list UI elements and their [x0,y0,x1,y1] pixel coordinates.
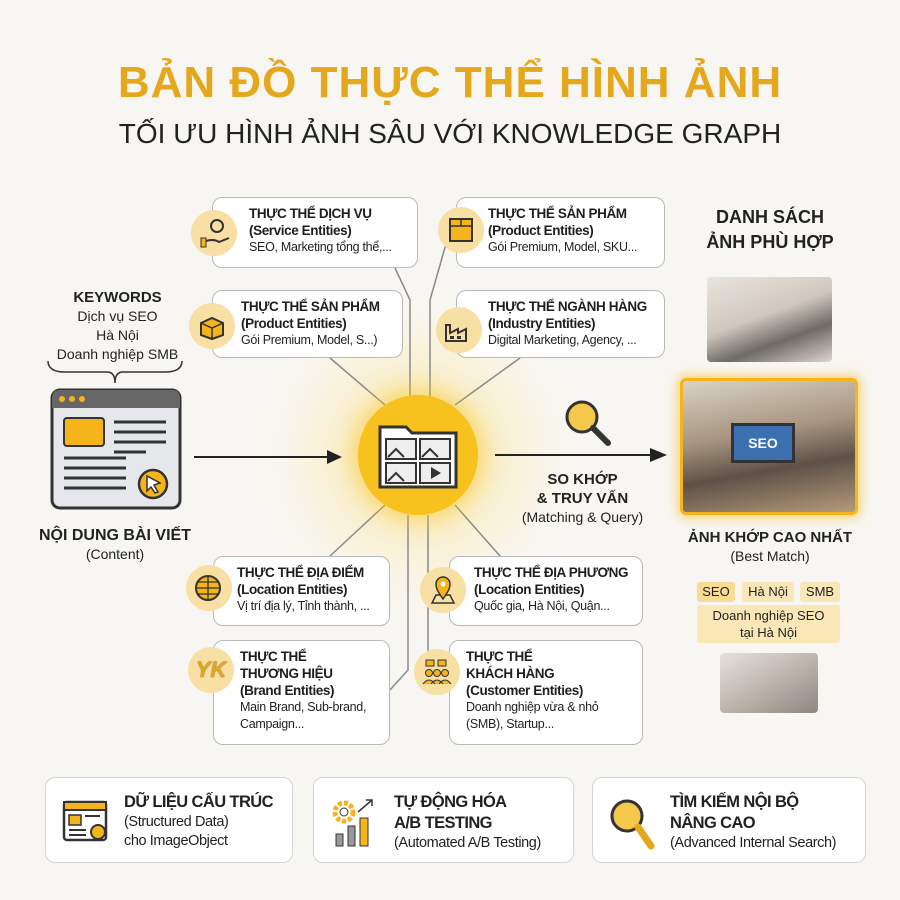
laptop [731,423,795,463]
card: structured data [45,777,293,863]
card: internal search [592,777,866,863]
icon: magnifier [566,400,611,446]
icon: map pin [420,567,466,613]
card: ab testing: (Automated A/B Testing) [394,835,541,851]
box: local entities: Quốc gia, Hà Nội, Quận... [474,599,610,613]
box: service entities: (Service Entities) [249,223,351,238]
best match label [688,528,852,564]
content label [39,526,191,562]
box: brand entities: THỰC THỂ [240,649,306,664]
box: product entities: THỰC THỂ SẢN PHẨM [241,299,380,314]
box: location entities: Vị trí địa lý, Tỉnh thành, ... [237,599,370,613]
icon: factory [436,307,482,353]
box: brand entities: Campaign... [240,717,304,731]
subtitle: TỐI ƯU HÌNH ẢNH SÂU VỚI KNOWLEDGE GRAPH [119,118,781,149]
card: internal search: (Advanced Internal Search) [670,835,836,851]
icon: service [191,210,237,256]
box: product entities: Gói Premium, Model, S...) [241,333,377,347]
box: service entities [212,197,418,268]
card: structured data: DỮ LIỆU CẤU TRÚC [124,793,273,811]
keywords [57,289,178,362]
box: customer entities: Doanh nghiệp vừa & nhỏ [466,700,598,714]
tags: SEO [702,584,730,599]
box: location entities: (Location Entities) [237,582,347,597]
box: industry entities [456,290,665,358]
box: local entities: THỰC THỂ ĐỊA PHƯƠNG [474,565,628,580]
icon: brand: YK [196,657,226,682]
box: customer entities [449,640,643,745]
card: ab testing: TỰ ĐỘNG HÓA [394,793,507,811]
box: industry entities: Digital Marketing, Agency, ... [488,333,636,347]
matching label [522,470,643,525]
tag: doanh nghiep: Doanh nghiệp SEO [712,608,825,623]
keywords: Dịch vụ SEO [77,308,158,324]
box: brand entities: Main Brand, Sub-brand, [240,700,366,714]
box: location entities [213,556,390,626]
card: internal search: TÌM KIẾM NỘI BỘ [670,793,798,811]
matching label: (Matching & Query) [522,509,643,525]
box: product entities: (Product Entities) [241,316,346,331]
laptop: SEO [748,435,778,451]
card: structured data: (Structured Data) [124,814,228,830]
box: customer entities: (SMB), Startup... [466,717,554,731]
box: product entities top: Gói Premium, Model, SKU... [488,240,637,254]
arrow: hub to images [495,448,667,462]
card: ab testing: A/B TESTING [394,814,492,832]
keywords: KEYWORDS [73,289,162,306]
box: location entities: THỰC THỂ ĐỊA ĐIỂM [237,565,364,580]
tags [697,582,840,602]
icon: content browser window [50,388,182,510]
card: structured data: cho ImageObject [124,833,228,849]
title: BẢN ĐỒ THỰC THỂ HÌNH ẢNH [118,58,782,107]
tag: doanh nghiep: tại Hà Nội [740,625,797,640]
tags: SMB [806,584,834,599]
box: service entities: SEO, Marketing tổng thể,... [249,240,392,254]
keywords: Doanh nghiệp SMB [57,346,178,362]
tags: Hà Nội [748,584,788,599]
photo: meeting [707,277,832,362]
card: internal search: NÂNG CAO [670,814,755,832]
box: service entities: THỰC THỂ DỊCH VỤ [249,206,372,221]
box: industry entities: THỰC THỂ NGÀNH HÀNG [488,299,647,314]
box: product entities top: (Product Entities) [488,223,593,238]
content label: (Content) [86,546,144,562]
card: ab testing [313,777,574,863]
icon: customers [414,649,460,695]
box: product entities top [456,197,665,268]
matching label: SO KHỚP [547,471,618,488]
box: industry entities: (Industry Entities) [488,316,595,331]
photo: laptop [720,653,818,713]
box: brand entities: THƯƠNG HIỆU [240,666,333,681]
icon: open box [189,303,235,349]
box: brand entities: (Brand Entities) [240,683,334,698]
icon: image folder [378,426,458,488]
box: customer entities: THỰC THỂ [466,649,532,664]
heading: image list [706,206,834,252]
box: local entities: (Location Entities) [474,582,584,597]
icon: box [438,207,484,253]
center hub [358,395,478,515]
box: product entities top: THỰC THỂ SẢN PHẨM [488,206,627,221]
keywords: Hà Nội [96,327,139,343]
best match label: (Best Match) [730,548,810,564]
best match label: ẢNH KHỚP CAO NHẤT [688,529,852,546]
content label: NỘI DUNG BÀI VIẾT [39,527,191,544]
heading: image list: DANH SÁCH [716,207,824,227]
photo: best match [680,378,858,515]
box: customer entities: KHÁCH HÀNG [466,666,554,681]
box: product entities [212,290,403,358]
box: local entities [449,556,643,626]
icon: brand [188,647,234,693]
tag: doanh nghiep [697,605,840,643]
box: brand entities [213,640,390,745]
arrow: content to hub [194,450,342,464]
heading: image list: ẢNH PHÙ HỢP [706,232,834,252]
icon: globe [186,565,232,611]
box: customer entities: (Customer Entities) [466,683,583,698]
brace [47,361,183,383]
matching label: & TRUY VẤN [537,490,628,507]
